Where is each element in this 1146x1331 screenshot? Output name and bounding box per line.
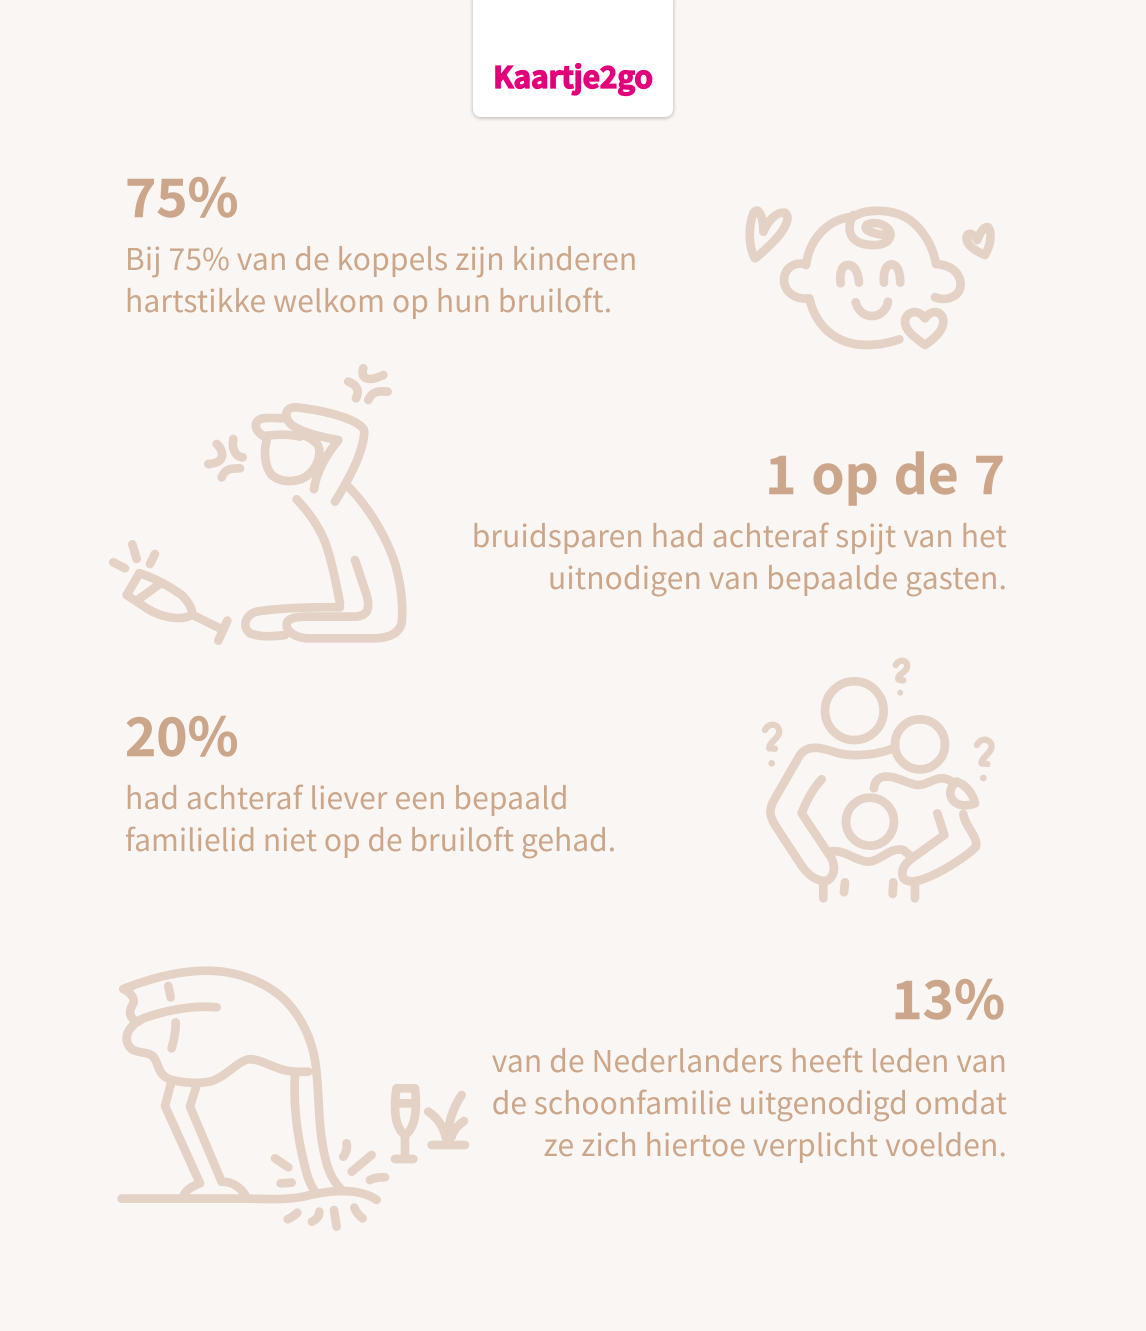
icon: family with question marks [765,661,992,898]
stat text: 13%: ze zich hiertoe verplicht voelden. [543,1121,1007,1165]
stat text: 75% [125,235,637,321]
stat heading: 75%: 75% [125,157,239,233]
logo wordmark: Kaartje2go [493,53,653,97]
question mark right [977,740,992,781]
logo card [473,0,673,117]
question mark left [765,725,779,767]
icon: baby with hearts [750,211,990,345]
stat text: 75%: hartstikke welkom op hun bruiloft. [125,277,612,321]
stat text: 1 op de 7: uitnodigen van bepaalde gasten. [548,554,1007,598]
stat text: 1 op de 7 [472,512,1007,598]
impact marks [275,1143,385,1227]
icon: ostrich with head in ground [122,971,465,1227]
icon: man holding head with fallen glass [113,368,402,641]
stat heading: 13%: 13% [891,959,1005,1035]
fallen glass [113,544,227,641]
anger mark right [348,368,388,400]
stat text: 75%: Bij 75% van de koppels zijn kinderen [125,235,637,279]
anger mark left [208,439,243,477]
stat text: 13%: de schoonfamilie uitgenodigd omdat [492,1079,1007,1123]
stat text: 20%: had achteraf liever een bepaald [125,774,569,818]
stat text: 13% [492,1037,1007,1165]
ostrich [122,971,377,1200]
champagne glass [395,1088,416,1159]
stat text: 20% [125,774,616,860]
question mark top [896,661,907,696]
stat heading: 1 op de 7: 1 op de 7 [765,434,1005,510]
stat text: 13%: van de Nederlanders heeft leden van [492,1037,1007,1081]
stat heading: 20%: 20% [125,696,239,772]
grass [428,1095,465,1145]
stat text: 1 op de 7: bruidsparen had achteraf spijt van het [472,512,1007,556]
man figure [245,407,402,638]
stat text: 20%: familielid niet op de bruiloft gehad. [125,816,616,860]
